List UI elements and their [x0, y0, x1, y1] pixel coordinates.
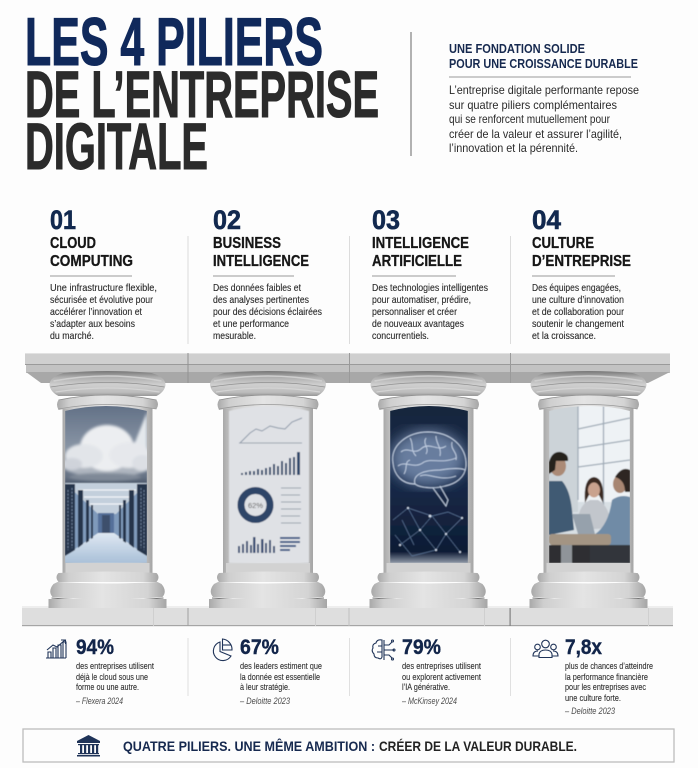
- panel: stat 7,8x: la performance financière: [565, 672, 648, 682]
- banner text: CRÉER DE LA VALEUR DURABLE.: [379, 738, 577, 754]
- panel: pilier 03 intelligence artificielle: de nouveaux avantages: [372, 319, 464, 330]
- panel: stat 7,8x: [533, 636, 653, 716]
- panel: pilier 01 cloud computing: s’adapter aux besoins: [50, 319, 135, 330]
- panel: stat 7,8x: 7,8x: [565, 636, 602, 659]
- panel: pilier 02 business intelligence: mesurable.: [213, 331, 256, 342]
- intro paragraph: [449, 83, 639, 155]
- panel: pilier 04 culture d'entreprise: soutenir le changement: [532, 319, 624, 330]
- panel: pilier 01 cloud computing: accélérer l’innovation et: [50, 307, 142, 318]
- small bar chart: [238, 537, 275, 553]
- plinth base: [22, 606, 673, 626]
- panel: pilier 03 intelligence artificielle: 03: [372, 205, 400, 235]
- column 4: [530, 371, 648, 608]
- column 2: [209, 371, 327, 608]
- temple illustration: [22, 353, 673, 626]
- panel: pilier 03 intelligence artificielle: Des technologies intelligentes: [372, 283, 488, 294]
- icon: rising bar chart: [46, 640, 66, 658]
- panel: pilier 03 intelligence artificielle: INTELLIGENCE: [372, 235, 469, 252]
- title: [25, 4, 379, 183]
- image: cloud and data center: [65, 406, 147, 563]
- panel: pilier 03 intelligence artificielle: [372, 205, 488, 342]
- panel: stat 94%: – Flexera 2024: [75, 696, 123, 706]
- panel: pilier 01 cloud computing: sécurisée et évolutive pour: [50, 295, 153, 306]
- panel: stat 94%: forme ou une autre.: [76, 682, 139, 692]
- panel: pilier 02 business intelligence: INTELLIGENCE: [213, 253, 309, 270]
- panel: pilier 02 business intelligence: Des données faibles et: [213, 283, 301, 294]
- panel: pilier 02 business intelligence: BUSINESS: [213, 235, 281, 252]
- panel: pilier 01 cloud computing: Une infrastructure flexible,: [50, 283, 157, 294]
- panel: stat 79%: [372, 636, 481, 706]
- panel: pilier 02 business intelligence: des analyses pertinentes: [213, 295, 309, 306]
- title: LES 4 PILIERS: [25, 4, 323, 80]
- icon: AI brain: [372, 640, 395, 660]
- panel: pilier 03 intelligence artificielle: personnaliser et créer: [372, 307, 457, 318]
- icon: group of people: [533, 640, 558, 658]
- panel: stat 79%: – McKinsey 2024: [401, 696, 457, 706]
- bar chart: [241, 452, 300, 475]
- image: AI brain: [390, 402, 468, 563]
- panel: pilier 02 business intelligence: [213, 205, 322, 342]
- image: team meeting: [549, 402, 630, 563]
- laptop: [572, 514, 595, 534]
- banner text: [123, 737, 577, 754]
- panel: pilier 02 business intelligence: 02: [213, 205, 241, 235]
- panel: stat 94%: des entreprises utilisent: [76, 661, 154, 671]
- panel: stat 94%: 94%: [76, 636, 114, 659]
- panel: pilier 04 culture d'entreprise: Des équipes engagées,: [532, 283, 621, 294]
- panel: stat 79%: 79%: [402, 636, 441, 659]
- panel: stat 94%: [46, 636, 154, 706]
- panel: pilier 03 intelligence artificielle: concurrentiels.: [372, 331, 429, 342]
- panel: pilier 03 intelligence artificielle: pour automatiser, prédire,: [372, 295, 471, 306]
- panel: stat 67%: [213, 636, 322, 706]
- intro heading: POUR UNE CROISSANCE DURABLE: [449, 57, 638, 71]
- intro paragraph: sur quatre piliers complémentaires: [449, 98, 617, 112]
- panel: pilier 01 cloud computing: du marché.: [50, 331, 94, 342]
- panel: stat 79%: ou explorent activement: [402, 672, 481, 682]
- panel: pilier 04 culture d'entreprise: D’ENTREPRISE: [532, 253, 631, 270]
- panel: pilier 01 cloud computing: 01: [50, 205, 76, 235]
- legend lines: [281, 488, 301, 523]
- title: DIGITALE: [25, 109, 208, 183]
- panel: stat 7,8x: plus de chances d’atteindre: [565, 661, 653, 671]
- intro heading: [449, 42, 638, 71]
- person left: [549, 481, 574, 535]
- column 3: [370, 371, 488, 608]
- entablature: [25, 353, 670, 383]
- person centre: [579, 500, 609, 529]
- intro paragraph: l’innovation et la pérennité.: [449, 141, 578, 155]
- panel: pilier 04 culture d'entreprise: et la croissance.: [532, 331, 596, 342]
- icon: pie chart: [213, 639, 232, 661]
- donut chart 62%: [241, 490, 270, 520]
- panel: stat 67%: à leur stratégie.: [240, 682, 290, 692]
- panel: stat 67%: – Deloitte 2023: [239, 696, 291, 706]
- panel: pilier 04 culture d'entreprise: [532, 205, 631, 342]
- panel: stat 7,8x: une culture forte.: [565, 693, 621, 703]
- intro heading: UNE FONDATION SOLIDE: [449, 42, 585, 56]
- panel: pilier 04 culture d'entreprise: CULTURE: [532, 235, 594, 252]
- panel: pilier 03 intelligence artificielle: ARTIFICIELLE: [372, 253, 462, 270]
- banner: [23, 729, 674, 762]
- image: business dashboards: [229, 406, 309, 563]
- panel: stat 79%: l’IA générative.: [402, 682, 450, 692]
- intro paragraph: qui se renforcent mutuellement pour: [449, 112, 610, 126]
- panel: stat 67%: 67%: [240, 636, 279, 659]
- intro paragraph: L’entreprise digitale performante repose: [449, 83, 639, 97]
- panel: pilier 04 culture d'entreprise: une culture d’innovation: [532, 295, 624, 306]
- icon: classical temple: [77, 735, 100, 756]
- panel: stat 7,8x: – Deloitte 2023: [564, 706, 616, 716]
- image: business dashboards: 62%: [248, 501, 263, 510]
- table: [549, 534, 611, 545]
- panel: stat 7,8x: pour les entreprises avec: [565, 682, 646, 692]
- intro paragraph: créer de la valeur et assurer l’agilité,: [449, 127, 622, 141]
- line chart: [240, 418, 302, 443]
- panel: pilier 02 business intelligence: et une performance: [213, 319, 289, 330]
- panel: pilier 04 culture d'entreprise: 04: [532, 205, 561, 235]
- panel: stat 67%: la donnée est essentielle: [240, 672, 320, 682]
- panel: pilier 02 business intelligence: pour des décisions éclairées: [213, 307, 322, 318]
- panel: pilier 04 culture d'entreprise: et de collaboration pour: [532, 307, 624, 318]
- panel: stat 67%: des leaders estiment que: [240, 661, 322, 671]
- panel: stat 94%: déjà le cloud sous une: [76, 672, 148, 682]
- panel: stat 79%: des entreprises utilisent: [402, 661, 481, 671]
- person right: [595, 496, 630, 546]
- title: DE L’ENTREPRISE: [25, 57, 379, 131]
- banner text: QUATRE PILIERS. UNE MÊME AMBITION :: [123, 737, 375, 754]
- panel: pilier 01 cloud computing: CLOUD: [50, 235, 96, 252]
- panel: pilier 01 cloud computing: COMPUTING: [50, 253, 133, 270]
- intro text block: [449, 42, 639, 155]
- column 1: [48, 371, 166, 608]
- panel: pilier 01 cloud computing: [50, 205, 157, 342]
